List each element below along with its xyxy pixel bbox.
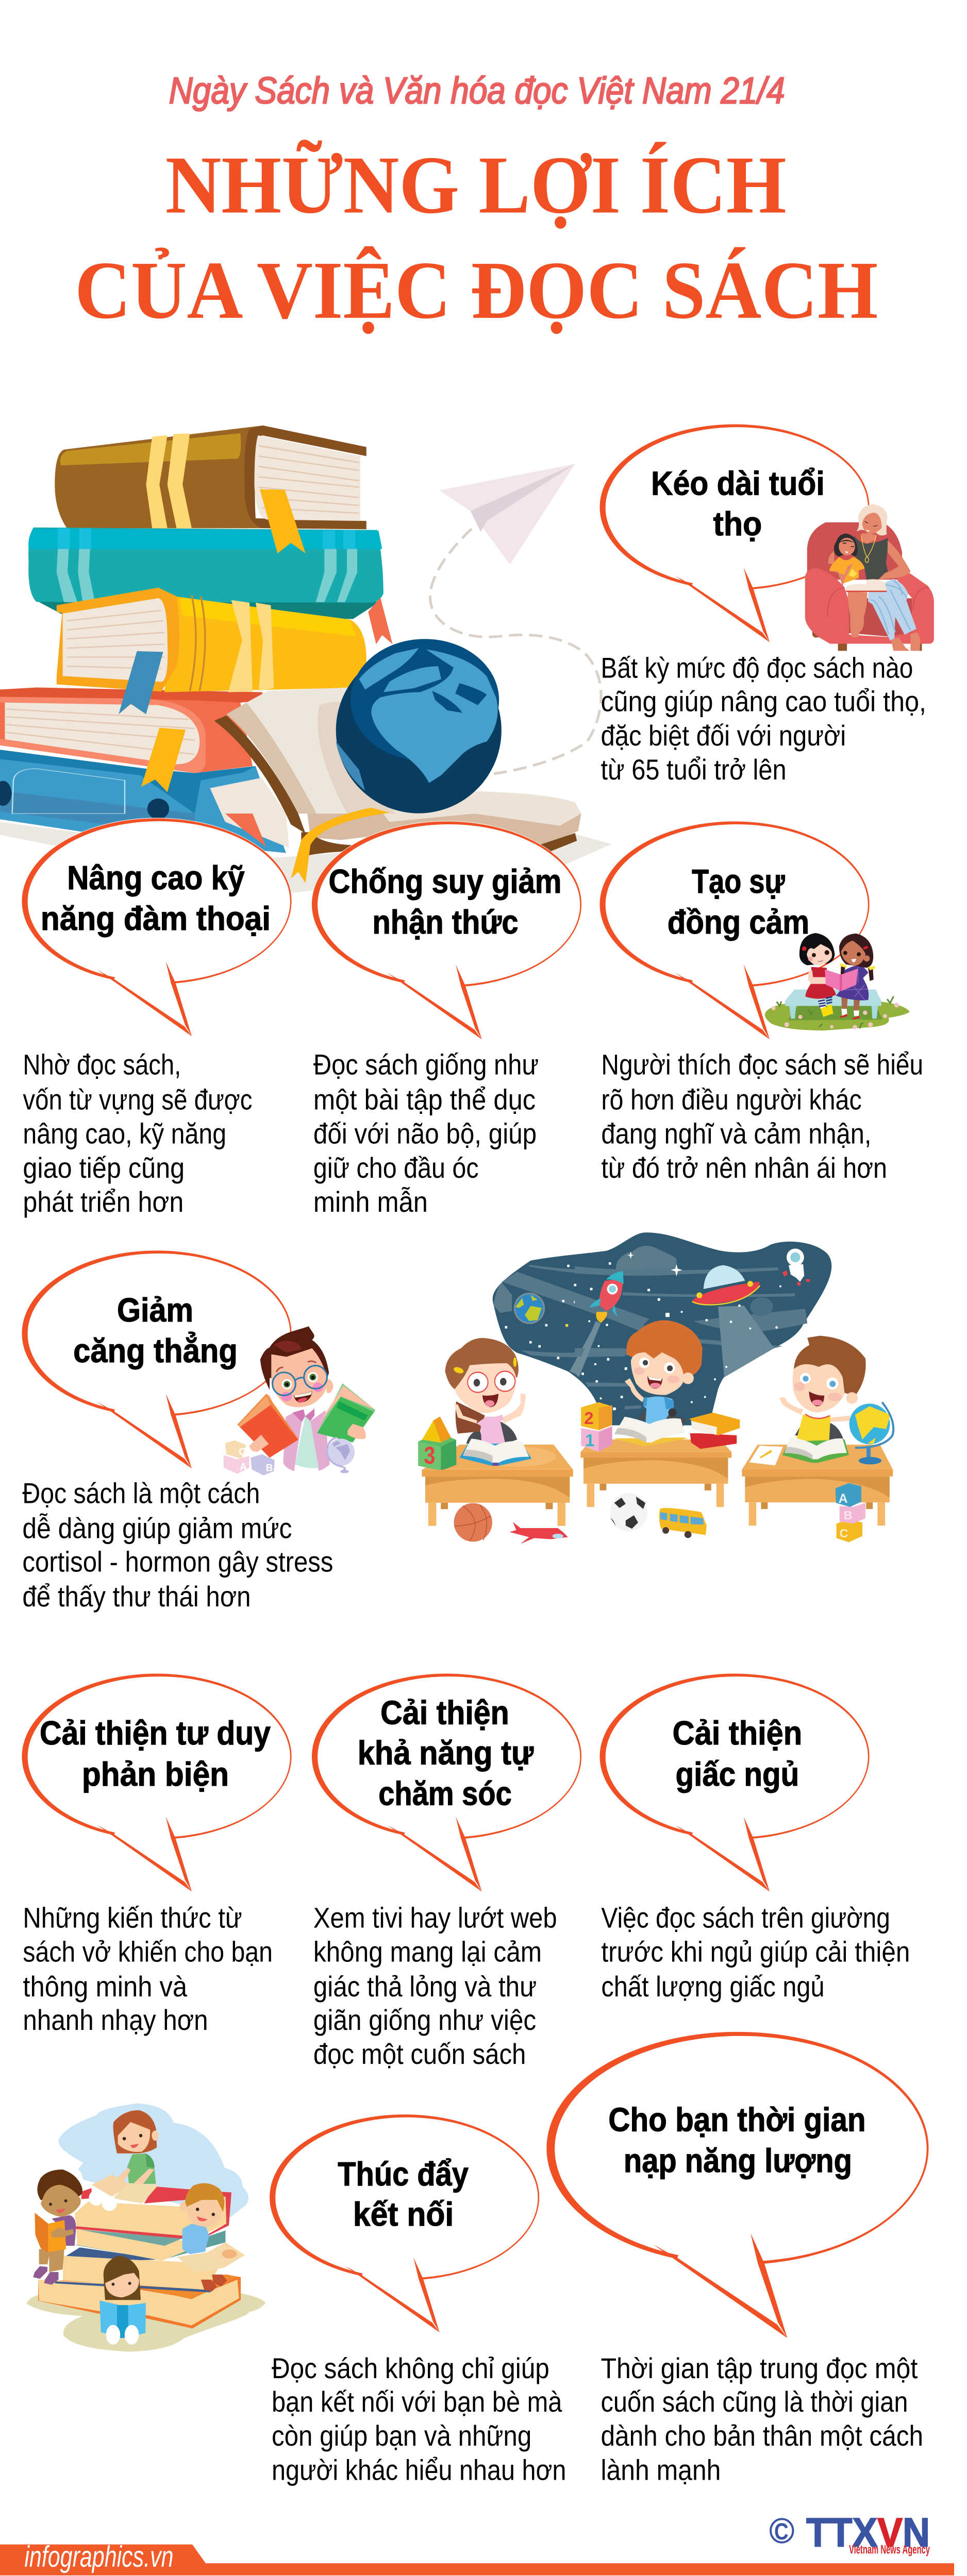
body text: đọc một cuốn sách <box>313 2038 526 2070</box>
icon: children reading on a pile of books <box>26 2104 265 2352</box>
heading: Cho bạn thời gian <box>608 2100 866 2138</box>
heading <box>673 1714 802 1793</box>
footer bar: infographics.vn <box>24 2540 174 2573</box>
left scene: girl at desk: 3 <box>424 1443 435 1469</box>
right scene: boys at desks: 1 <box>585 1431 595 1450</box>
body text: Đọc sách giống như <box>313 1048 539 1080</box>
paper plane with dashed path <box>430 464 601 774</box>
heading <box>41 859 271 937</box>
heading: chăm sóc <box>378 1775 512 1812</box>
body text: dành cho bản thân một cách <box>601 2420 923 2452</box>
body text: Đọc sách là một cách <box>22 1477 260 1509</box>
illustration: stack of books and globe <box>0 426 612 893</box>
heading: năng đàm thoại <box>41 900 271 937</box>
heading: Cải thiện tư duy <box>40 1714 271 1752</box>
brown book <box>55 426 366 529</box>
panel: Kéo dài tuổi thọ <box>600 424 926 786</box>
heading <box>338 2155 469 2233</box>
icon: teacher holding two books <box>224 1326 376 1476</box>
heading: kết nối <box>353 2195 454 2233</box>
globe <box>336 639 502 814</box>
icon: teacher holding two books: C <box>239 1446 246 1458</box>
heading: Thúc đẩy <box>338 2155 469 2193</box>
panel: Nâng cao kỹ năng đàm thoại <box>22 818 292 1218</box>
body text <box>23 1902 273 2036</box>
body text <box>272 2352 566 2486</box>
panel: Tạo sự đồng cảm <box>600 821 923 1184</box>
body text: đang nghĩ và cảm nhận, <box>601 1118 871 1150</box>
heading: giấc ngủ <box>676 1755 799 1793</box>
heading: Kéo dài tuổi <box>651 464 825 502</box>
body text: giãn giống như việc <box>313 2004 536 2036</box>
body text: giao tiếp cũng <box>23 1152 185 1184</box>
body text <box>313 1048 539 1218</box>
body text <box>22 1477 333 1613</box>
open book <box>214 687 581 883</box>
right scene: boys at desks <box>575 1248 893 1542</box>
body text: Đọc sách không chỉ giúp <box>272 2352 549 2384</box>
body text <box>313 1902 557 2070</box>
body text: một bài tập thể dục <box>313 1084 536 1116</box>
heading <box>40 1714 271 1793</box>
illustration: children at desks dreaming of space <box>418 1232 893 1544</box>
body text: nhanh nhạy hơn <box>23 2004 208 2036</box>
panel: Cải thiện giấc ngủ <box>600 1673 910 2003</box>
icon: teacher holding two books: A <box>239 1462 247 1473</box>
body text: còn giúp bạn và những <box>272 2420 531 2452</box>
body text: đối với não bộ, giúp <box>313 1118 537 1150</box>
body text: Thời gian tập trung đọc một <box>601 2352 918 2384</box>
logo: TTXVN: TTXVN <box>806 2510 930 2555</box>
left scene: girl at desk <box>418 1246 676 1544</box>
panel: Cải thiện khả năng tự chăm sóc <box>312 1673 581 2070</box>
heading <box>328 862 561 941</box>
panel: Thúc đẩy kết nối <box>270 2114 566 2486</box>
body text: người khác hiểu nhau hơn <box>272 2454 566 2486</box>
plane <box>439 464 575 565</box>
blue book <box>0 750 289 853</box>
heading: Cải thiện <box>380 1694 509 1732</box>
right scene: boys at desks: C <box>840 1527 848 1540</box>
panel: Giảm căng thẳng <box>22 1250 333 1613</box>
body text: Bất kỳ mức độ đọc sách nào <box>601 652 913 684</box>
heading: Tạo sự <box>692 862 785 900</box>
body text: từ đó trở nên nhân ái hơn <box>601 1152 887 1184</box>
body text: Nhờ đọc sách, <box>23 1048 181 1080</box>
heading <box>651 464 825 543</box>
body text: sách vở khiến cho bạn <box>23 1936 273 1968</box>
body text: giác thả lỏng và thư <box>313 1971 537 2003</box>
footer bar <box>0 2540 954 2575</box>
heading: nhận thức <box>372 903 519 941</box>
right scene: boys at desks: B <box>844 1509 853 1522</box>
dashed flight path <box>430 529 601 774</box>
icon: teacher holding two books: B <box>266 1463 273 1474</box>
body text: để thấy thư thái hơn <box>22 1581 251 1613</box>
icon: grandmother and child on armchair <box>805 504 934 651</box>
teal book <box>28 528 384 619</box>
body text: dễ dàng giúp giảm mức <box>22 1513 292 1545</box>
heading: đồng cảm <box>668 903 809 941</box>
body text <box>601 1902 910 2003</box>
heading <box>73 1291 238 1369</box>
body text: rõ hơn điều người khác <box>601 1084 862 1116</box>
heading: Cải thiện <box>673 1714 802 1752</box>
panel: Cho bạn thời gian nạp năng lượng <box>546 2031 928 2486</box>
heading: Giảm <box>117 1291 193 1329</box>
body text: vốn từ vựng sẽ được <box>23 1084 252 1116</box>
body text: nâng cao, kỹ năng <box>23 1118 226 1150</box>
title: CỦA VIỆC ĐỌC SÁCH <box>75 245 878 336</box>
right scene: boys at desks: A <box>839 1492 848 1506</box>
body text: thông minh và <box>23 1971 187 2003</box>
heading: thọ <box>713 505 762 543</box>
body text: Xem tivi hay lướt web <box>313 1902 557 1934</box>
body text: trước khi ngủ giúp cải thiện <box>601 1936 910 1968</box>
yellow book <box>57 588 366 692</box>
body text <box>601 2352 923 2486</box>
body text: từ 65 tuổi trở lên <box>601 754 787 786</box>
subtitle: Ngày Sách và Văn hóa đọc Việt Nam 21/4 <box>169 70 785 111</box>
heading: Nâng cao kỹ <box>67 859 245 896</box>
body text: cortisol - hormon gây stress <box>22 1546 333 1578</box>
body text: bạn kết nối với bạn bè mà <box>272 2386 562 2418</box>
body text: minh mẫn <box>313 1186 428 1218</box>
title <box>75 140 878 336</box>
body text: lành mạnh <box>601 2454 721 2486</box>
heading: khả năng tự <box>358 1734 534 1772</box>
body text: Việc đọc sách trên giường <box>601 1902 890 1934</box>
body text: đặc biệt đối với người <box>601 720 846 752</box>
salmon book <box>0 687 269 773</box>
title: NHỮNG LỢI ÍCH <box>165 140 787 231</box>
body text: chất lượng giấc ngủ <box>601 1971 825 2003</box>
ribbon: red <box>368 598 393 644</box>
body text <box>23 1048 252 1218</box>
body text <box>601 1048 923 1184</box>
body text: giữ cho đầu óc <box>313 1152 479 1184</box>
body text: cuốn sách cũng là thời gian <box>601 2386 908 2418</box>
logo: TTXVN: C <box>774 2518 789 2545</box>
body text: cũng giúp nâng cao tuổi thọ, <box>601 686 926 718</box>
heading <box>608 2100 866 2179</box>
panel: Chống suy giảm nhận thức <box>312 821 581 1218</box>
body text: Những kiến thức từ <box>23 1902 242 1934</box>
right scene: boys at desks: 2 <box>584 1409 594 1428</box>
icon: two girls reading on a bench <box>765 933 910 1030</box>
panel: Cải thiện tư duy phản biện <box>22 1673 292 2036</box>
body text <box>601 652 926 786</box>
heading <box>668 862 809 941</box>
table shadow <box>0 822 612 893</box>
heading <box>358 1694 534 1812</box>
ribbons <box>260 489 306 553</box>
heading: Chống suy giảm <box>328 862 561 900</box>
space cloud <box>493 1232 831 1425</box>
body text: không mang lại cảm <box>313 1936 542 1968</box>
heading: căng thẳng <box>73 1332 238 1369</box>
body text: phát triển hơn <box>23 1186 184 1218</box>
heading: nạp năng lượng <box>624 2142 852 2179</box>
heading: phản biện <box>82 1755 229 1793</box>
